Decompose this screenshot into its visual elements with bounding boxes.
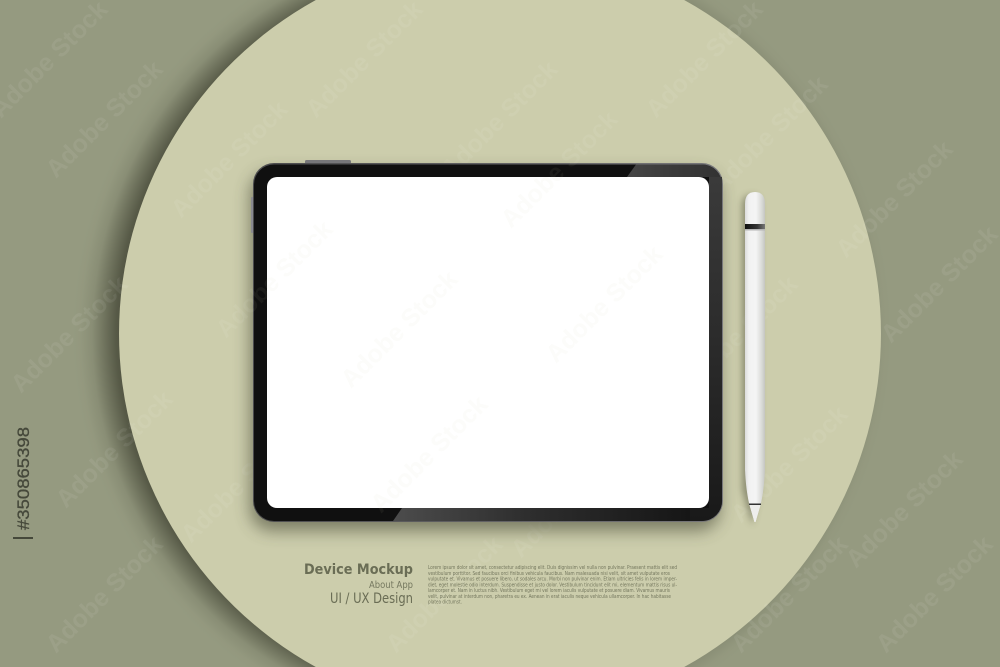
watermark on screen: Adobe Stock [365, 390, 493, 518]
heading block [304, 562, 413, 607]
screen [267, 177, 709, 508]
watermark text: Adobe Stock [365, 390, 493, 518]
stock id number: #350865398 [14, 427, 33, 530]
watermark text: Adobe Stock [210, 215, 338, 343]
body text block: velit, pulvinar at interdum non, pharetra eu ex. Aenean in erat iaculis neque vehicula ullamcorper. In hac habitasse [428, 594, 671, 600]
watermark text: Adobe Stock [840, 445, 968, 573]
pen body [745, 192, 765, 522]
pen band [745, 224, 765, 229]
tablet side button [251, 197, 254, 233]
subheading: about app: About App [369, 580, 413, 591]
tablet top buttons [305, 160, 351, 164]
pen tip ring [749, 504, 761, 505]
bezel reflection top right [627, 164, 722, 300]
bezel reflection bottom [393, 508, 690, 521]
tablet [210, 105, 723, 531]
watermark text: Adobe Stock [725, 400, 853, 528]
watermark text: Adobe Stock [40, 55, 168, 183]
stylus pen [742, 192, 765, 525]
watermark text: Adobe Stock [725, 530, 853, 658]
pen tip [750, 505, 760, 522]
watermark text: Adobe Stock [175, 420, 303, 548]
watermark on screen: Adobe Stock [540, 240, 668, 368]
watermark text: Adobe Stock [380, 530, 508, 658]
pen shadow [742, 195, 760, 525]
watermark on screen: Adobe Stock [335, 265, 463, 393]
body text block: Lorem ipsum dolor sit amet, consectetur adipiscing elit. Duis dignissim vel nulla non pulvinar. Praesent mattis elit sed [428, 565, 677, 571]
heading: device mockup: Device Mockup [304, 562, 413, 578]
body text block: vestibulum porttitor. Sed faucibus orci finibus vehicula faucibus. Nam malesuada nisi velit, sit amet vulputate eros [428, 571, 670, 577]
watermark on screen: Adobe Stock [210, 215, 338, 343]
pen band highlight [745, 229, 765, 230]
watermark text: Adobe Stock [495, 105, 623, 233]
body text block: diet, eget molestie odio interdum. Suspendisse et justo dolor. Vestibulum tincidunt elit mi, elementum mattis risus ul- [428, 582, 677, 588]
watermark text: Adobe Stock [435, 55, 563, 183]
bezel reflection right [690, 177, 722, 521]
watermark text: Adobe Stock [505, 435, 633, 563]
body text block: lamcorper et. Nam in luctus nibh. Vestibulum eget mi vel lorem iaculis vulputate et posuere diam. Vivamus mauris [428, 588, 670, 594]
tablet body [253, 163, 723, 522]
watermark text: Adobe Stock [705, 70, 833, 198]
watermark text: Adobe Stock [50, 385, 178, 513]
tablet shadow [250, 172, 720, 531]
body text block: platea dictumst. [428, 600, 462, 606]
watermark on screen [210, 105, 668, 518]
subheading: ui ux design: UI / UX Design [330, 591, 413, 607]
watermark text: Adobe Stock [830, 135, 958, 263]
body text block: vulputate et. Vivamus et posuere libero, ut sodales arcu. Morbi non pulvinar enim. Etiam ultricies felis in lorem imper- [428, 577, 677, 583]
watermark text: Adobe Stock [165, 95, 293, 223]
watermark text: Adobe Stock [40, 530, 168, 658]
body text block [428, 565, 677, 606]
watermark text: Adobe Stock [675, 270, 803, 398]
watermark text: Adobe Stock [870, 530, 998, 658]
watermark text: Adobe Stock [875, 220, 1000, 348]
watermark on screen: Adobe Stock [495, 105, 623, 233]
panel: pale green circle [119, 0, 881, 667]
watermark text: Adobe Stock [5, 270, 133, 398]
watermark text: Adobe Stock [335, 265, 463, 393]
watermark text: Adobe Stock [540, 240, 668, 368]
tablet bezel [254, 164, 722, 521]
